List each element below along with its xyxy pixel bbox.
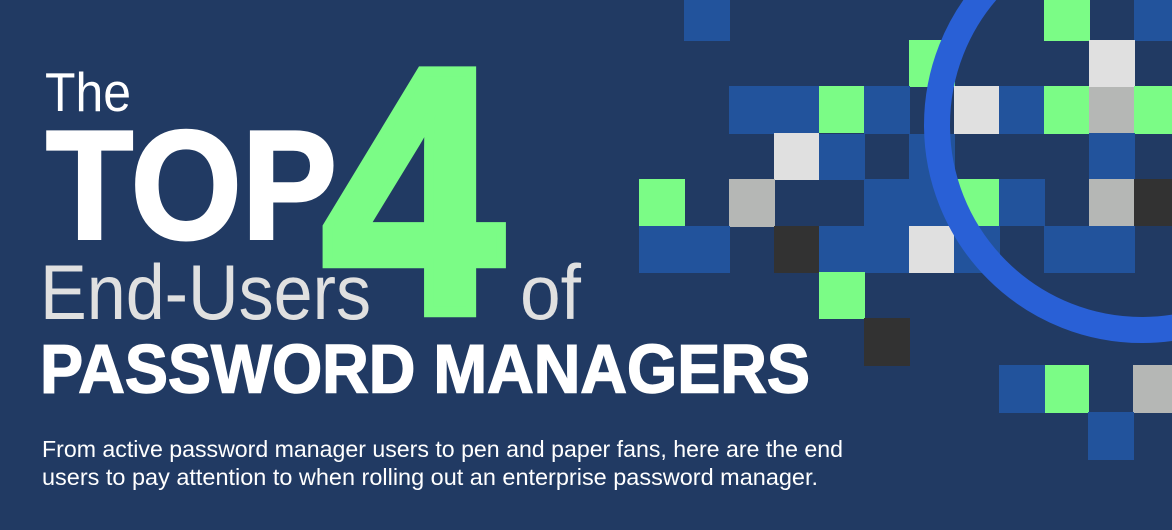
heading: End-Users: End-Users	[40, 248, 371, 336]
heading: The: The	[45, 61, 131, 123]
pixel mosaic	[639, 0, 1172, 460]
magnifier ring	[937, 0, 1172, 330]
heading: of: of	[520, 248, 581, 336]
heading: PASSWORD MANAGERS: PASSWORD MANAGERS	[40, 330, 810, 408]
description text: From active password manager users to pen and paper fans, here are the end	[42, 436, 843, 462]
description text	[42, 436, 843, 490]
big numeral 4: 4	[322, 0, 505, 387]
description text: users to pay attention to when rolling out an enterprise password manager.	[42, 464, 818, 490]
heading: TOP: TOP	[46, 98, 337, 272]
